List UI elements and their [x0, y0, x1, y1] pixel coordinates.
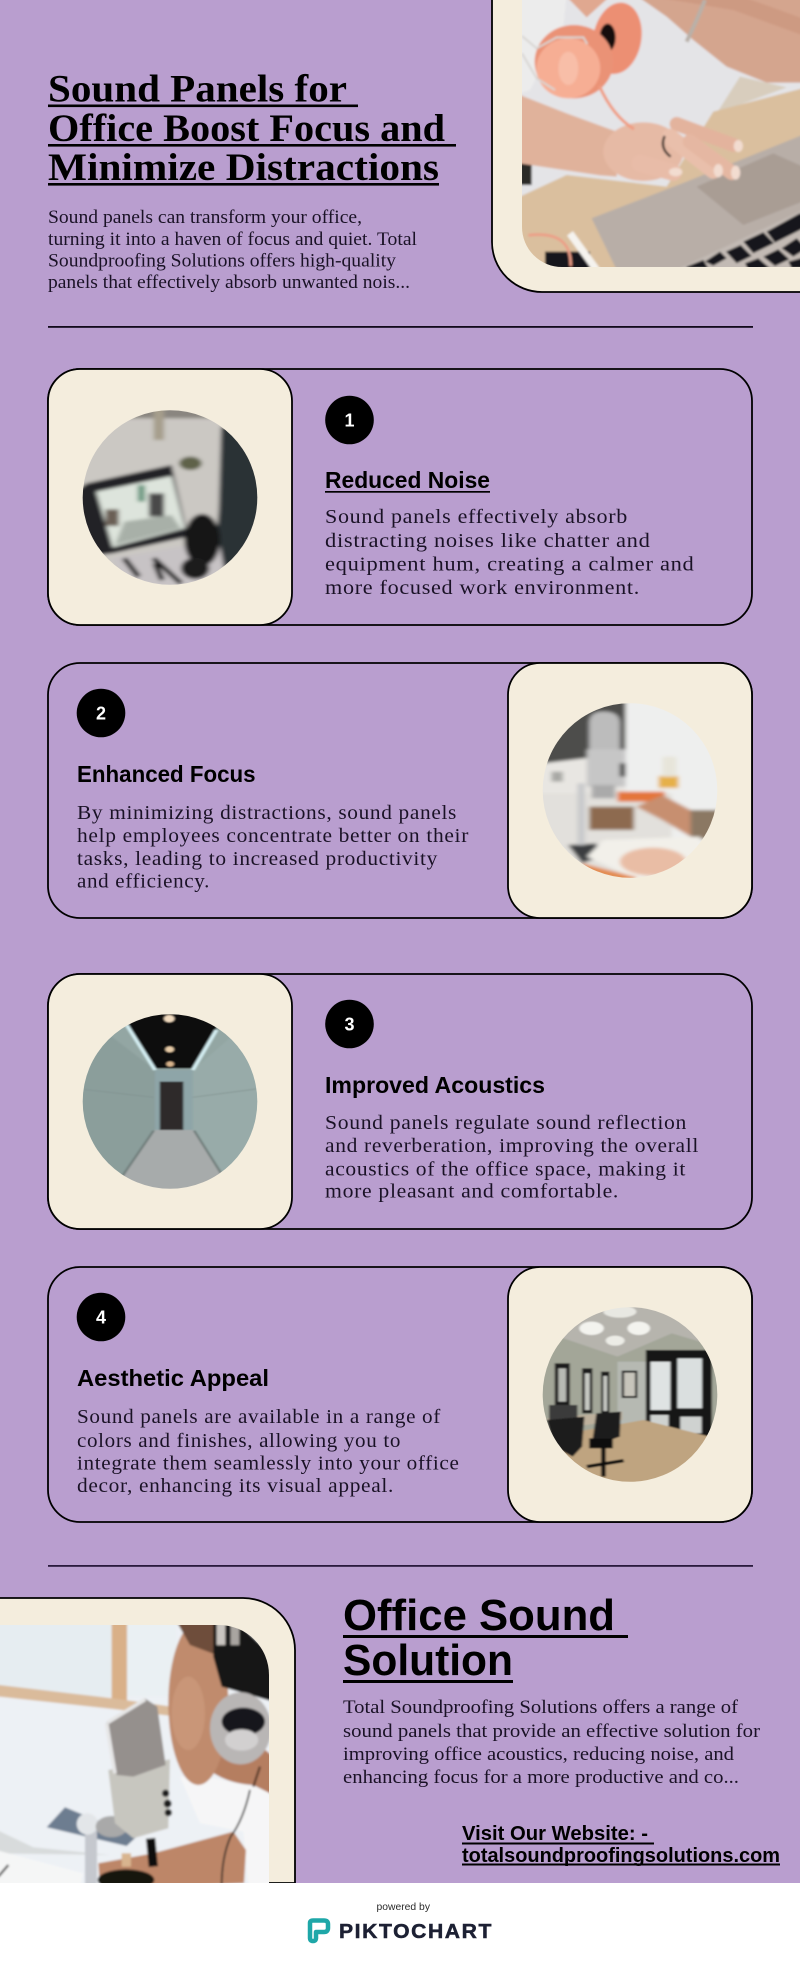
number badge 1	[325, 396, 374, 444]
number badge 3: 3	[344, 1014, 355, 1034]
number badge 2	[77, 689, 125, 737]
heading: aesthetic appeal: Aesthetic Appeal	[77, 1365, 269, 1391]
text: improved acoustics: and reverberation, improving the overall	[325, 1136, 699, 1157]
text: solution paragraph: improving office acoustics, reducing noise, and	[343, 1745, 735, 1765]
panel: card 3 improved acoustics	[48, 974, 752, 1229]
text: enhanced focus: help employees concentrate better on their	[77, 826, 469, 847]
number badge 3	[325, 1000, 374, 1048]
text: aesthetic appeal: integrate them seamlessly into your office	[77, 1454, 460, 1474]
footer background	[0, 1883, 800, 1963]
intro paragraph: Soundproofing Solutions offers high-quality	[48, 252, 397, 272]
title: Minimize Distractions	[48, 145, 439, 189]
photo: hands on laptop with headphones	[500, 0, 800, 273]
text: aesthetic appeal: Sound panels are available in a range of	[77, 1407, 441, 1428]
heading: reduced noise: Reduced Noise	[325, 467, 490, 493]
panel: card 4 aesthetic appeal	[48, 1267, 752, 1522]
text: solution paragraph: enhancing focus for a more productive and co...	[343, 1768, 739, 1788]
text: aesthetic appeal: colors and finishes, allowing you to	[77, 1431, 401, 1452]
text: improved acoustics	[325, 1113, 699, 1202]
photo: meeting room	[542, 1307, 718, 1482]
text: enhanced focus	[77, 803, 469, 892]
heading: office sound solution	[343, 1591, 628, 1685]
intro paragraph	[48, 208, 417, 293]
website link	[462, 1823, 780, 1867]
intro paragraph: panels that effectively absorb unwanted nois...	[48, 273, 410, 293]
website link: totalsoundproofingsolutions.com	[462, 1845, 780, 1867]
title: Sound Panels for	[48, 66, 347, 110]
photo: microphone and notebook	[543, 704, 718, 878]
website link: Visit Our Website: -	[462, 1823, 648, 1845]
photo: camera monitor	[82, 410, 258, 585]
intro paragraph: turning it into a haven of focus and quiet. Total	[48, 230, 417, 250]
heading: enhanced focus: Enhanced Focus	[77, 761, 256, 787]
icon: piktochart logo mark	[310, 1920, 328, 1941]
text: improved acoustics: more pleasant and comfortable.	[325, 1182, 619, 1202]
panel: card 2 enhanced focus	[48, 663, 752, 918]
text: aesthetic appeal	[77, 1407, 460, 1497]
footer: powered by: powered by	[376, 1901, 431, 1913]
number badge 4: 4	[96, 1308, 106, 1328]
panel: header photo frame	[492, 0, 800, 292]
text: enhanced focus: tasks, leading to increased productivity	[77, 849, 438, 870]
title	[48, 66, 456, 189]
text: aesthetic appeal: decor, enhancing its visual appeal.	[77, 1476, 394, 1497]
text: solution paragraph: Total Soundproofing Solutions offers a range of	[343, 1698, 739, 1718]
number badge 2: 2	[96, 704, 106, 724]
text: improved acoustics: Sound panels regulate sound reflection	[325, 1113, 687, 1134]
text: reduced noise	[325, 507, 694, 599]
number badge 4	[77, 1293, 125, 1341]
intro paragraph: Sound panels can transform your office,	[48, 208, 362, 228]
photo: corridor	[82, 1014, 258, 1189]
panel: card 1 reduced noise	[48, 369, 752, 625]
text: enhanced focus: and efficiency.	[77, 872, 210, 892]
footer: piktochart wordmark: PIKTOCHART	[339, 1921, 493, 1943]
number badge 1: 1	[344, 410, 355, 430]
text: enhanced focus: By minimizing distractions, sound panels	[77, 803, 457, 824]
heading: office sound solution: Solution	[343, 1636, 513, 1685]
panel: bottom photo frame	[0, 1598, 300, 1891]
photo: person with microphone	[0, 1620, 280, 1891]
heading: improved acoustics: Improved Acoustics	[325, 1072, 545, 1098]
text: reduced noise: distracting noises like chatter and	[325, 531, 651, 552]
text: solution paragraph: sound panels that provide an effective solution for	[343, 1722, 760, 1742]
text: reduced noise: more focused work environment.	[325, 578, 640, 599]
text: reduced noise: equipment hum, creating a calmer and	[325, 554, 694, 576]
text: solution paragraph	[343, 1698, 760, 1788]
text: reduced noise: Sound panels effectively absorb	[325, 507, 628, 528]
text: improved acoustics: acoustics of the office space, making it	[325, 1160, 686, 1180]
heading: office sound solution: Office Sound	[343, 1591, 615, 1640]
title: Office Boost Focus and	[48, 106, 445, 150]
